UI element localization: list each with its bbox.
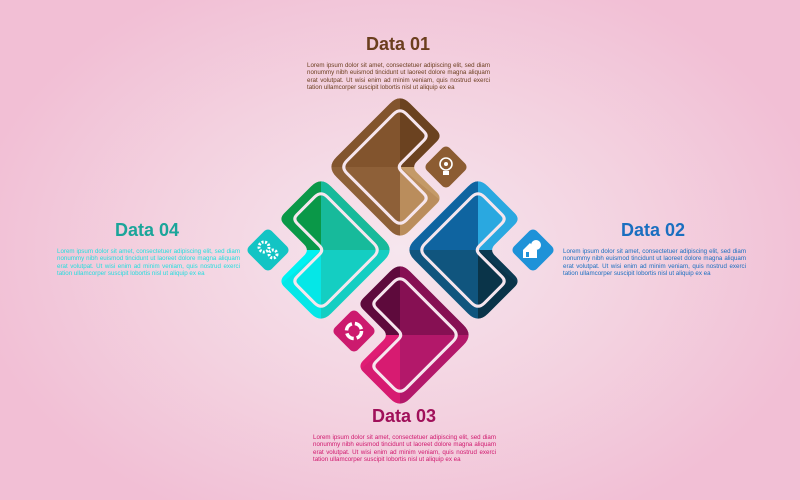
diagram: four C-shaped diamonds (248, 98, 554, 404)
shape: blue Data 02 (409, 181, 518, 319)
shape: magenta Data 03 (360, 266, 469, 404)
text: Data 04 description: Lorem ipsum dolor sit amet, consectetuer adipiscing elit, sed diam nonummy nibh euismod tincidunt ut laoreet dolore magna aliquam erat volutpat. Ut wisi enim ad minim veniam, quis nostrud exerci tation ullamcorper suscipit lobortis nisl ut aliquip ex ea (57, 248, 240, 277)
shape: teal Data 04 (281, 181, 390, 319)
shape: brown Data 01 (331, 98, 440, 236)
icon: lightbulb (423, 144, 469, 190)
text: Data 03 description: Lorem ipsum dolor sit amet, consectetuer adipiscing elit, sed diam nonummy nibh euismod tincidunt ut laoreet dolore magna aliquam erat volutpat. Ut wisi enim ad minim veniam, quis nostrud exerci tation ullamcorper suscipit lobortis nisl ut aliquip ex ea (313, 434, 496, 463)
icon: cycle arrows (331, 308, 377, 354)
heading: Data 04: Data 04 (115, 220, 179, 240)
icon: gears (245, 227, 291, 273)
icon: house (510, 227, 556, 273)
heading: Data 03: Data 03 (372, 406, 436, 426)
heading: Data 01: Data 01 (366, 34, 430, 54)
heading: Data 02: Data 02 (621, 220, 685, 240)
text: Data 01 description: Lorem ipsum dolor sit amet, consectetuer adipiscing elit, sed diam nonummy nibh euismod tincidunt ut laoreet dolore magna aliquam erat volutpat. Ut wisi enim ad minim veniam, quis nostrud exerci tation ullamcorper suscipit lobortis nisl ut aliquip ex ea (307, 62, 490, 91)
text: Data 02 description: Lorem ipsum dolor sit amet, consectetuer adipiscing elit, sed diam nonummy nibh euismod tincidunt ut laoreet dolore magna aliquam erat volutpat. Ut wisi enim ad minim veniam, quis nostrud exerci tation ullamcorper suscipit lobortis nisl ut aliquip ex ea (563, 248, 746, 277)
